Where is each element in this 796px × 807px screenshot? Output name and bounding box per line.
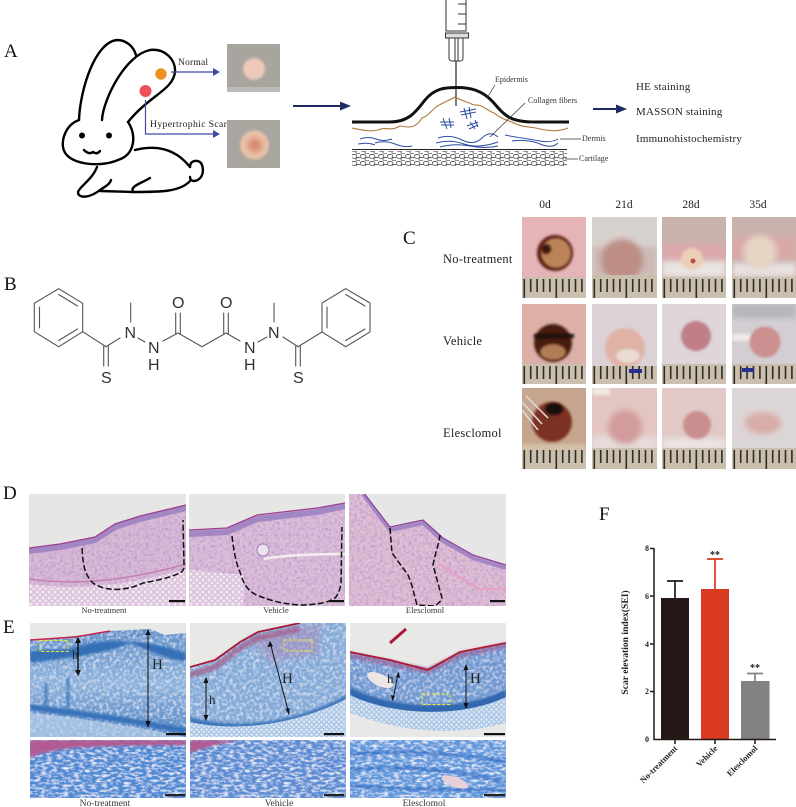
panel E: masson no-treatment: H [152,657,163,673]
chemical structure: elesclomol: S [101,370,112,387]
panel A: rabbit model [63,40,280,197]
chemical structure: elesclomol: O [220,295,232,312]
x labels: Elesclomol [725,743,760,778]
chemical structure: elesclomol [34,289,370,387]
photo: vehicle 21d [592,304,657,384]
panel A: injection schematic [352,0,609,166]
photo: elesclomol 21d [592,388,657,469]
leader lines [487,85,581,159]
chemical structure: elesclomol: O [172,295,184,312]
y ticks: 8 [645,544,649,553]
significance stars: ** [750,663,760,674]
row label: vehicle: Vehicle [443,334,482,348]
day headers: 28d [682,199,700,211]
panel E: masson no-treatment: h [72,647,79,662]
chemical structure: elesclomol: N [148,340,160,357]
y ticks: 4 [645,640,649,649]
label: hypertrophic scar: Hypertrophic Scar [150,119,228,130]
row label: elesclomol: Elesclomol [443,426,502,440]
panel F: bar chart [620,544,776,785]
arrow: scar [146,100,220,138]
y ticks: 0 [645,735,649,744]
panel E: masson elesclomol: h [387,671,394,686]
label: epidermis: Epidermis [495,75,528,84]
panel label E: E [3,617,15,638]
caption: Vehicle [263,605,289,615]
y ticks: 2 [645,687,649,696]
arrow: to staining [593,104,627,114]
normal site dot [155,68,167,80]
axes [650,548,776,744]
panel label B: B [4,274,17,295]
x labels: Vehicle [694,743,720,769]
photo: elesclomol 28d [662,388,726,469]
bar: vehicle [701,559,729,739]
photo: no-treatment 0d [522,217,586,298]
cartilage [352,151,567,166]
chemical structure: elesclomol: N [268,325,280,342]
x labels: No-treatment [638,743,680,785]
label: collagen fibers: Collagen fibers [528,96,577,105]
photo: elesclomol 35d [732,388,796,469]
chemical structure: elesclomol: N [124,325,136,342]
photo: no-treatment 28d [662,217,726,298]
staining methods list: HE staining [636,81,691,93]
arrow: to injection [293,102,351,110]
label: dermis: Dermis [582,134,606,143]
photo: vehicle 35d [732,304,796,384]
photo: elesclomol 0d [522,388,586,469]
panel D: HE staining vehicle [189,494,345,606]
chemical structure: elesclomol: S [293,370,304,387]
panel D: HE staining no-treatment [29,494,186,606]
photo: no-treatment 21d [592,217,657,298]
panel D: HE staining elesclomol [349,494,506,606]
panel E: detail elesclomol [350,740,506,798]
panel label F: F [599,504,610,525]
panel E: masson elesclomol: H [470,671,481,687]
panel E: masson vehicle [190,623,346,737]
scar site dot [140,85,152,97]
y ticks [645,544,649,744]
day headers [539,199,767,211]
staining methods list [636,81,742,145]
icon: rabbit [63,40,203,197]
caption: Elesclomol [406,605,445,615]
panel label D: D [3,483,17,504]
photo: vehicle 0d [522,304,586,384]
icon: syringe [446,0,468,106]
day headers: 0d [539,199,551,211]
panel E: masson vehicle: h [209,692,216,707]
arrow: normal [171,68,220,76]
row label: no-treatment: No-treatment [443,252,513,266]
panel E: detail no-treatment [30,740,186,798]
staining methods list: Immunohistochemistry [636,133,742,145]
panel label C: C [403,228,416,249]
photo grid [522,217,796,469]
panel E: masson no-treatment [30,623,186,737]
day headers: 21d [615,199,633,211]
bar: no-treatment [661,581,689,739]
chemical structure: elesclomol: N [244,340,256,357]
label: normal: Normal [178,58,208,68]
collagen fibers [358,107,558,148]
panel E: detail vehicle [190,740,346,798]
photo: vehicle 28d [662,304,726,384]
label: cartilage: Cartilage [579,154,609,163]
bar: elesclomol [741,674,770,739]
photo: hypertrophic scar tissue [227,120,280,168]
chemical structure: elesclomol: H [244,357,256,374]
y axis title: Scar elevation index(SEI) [620,590,631,695]
staining methods list: MASSON staining [636,106,723,118]
y ticks: 6 [645,592,649,601]
chemical structure: elesclomol: H [148,357,160,374]
caption: No-treatment [81,605,127,615]
panel E: masson vehicle: H [282,671,293,687]
skin layers [352,88,569,150]
marker [40,640,68,652]
panel label A: A [4,41,18,62]
photo: normal tissue [227,44,280,92]
x labels [638,743,760,785]
photo: no-treatment 35d [732,217,796,298]
day headers: 35d [749,199,767,211]
significance stars: ** [710,550,720,561]
panel E: masson elesclomol [350,623,506,737]
